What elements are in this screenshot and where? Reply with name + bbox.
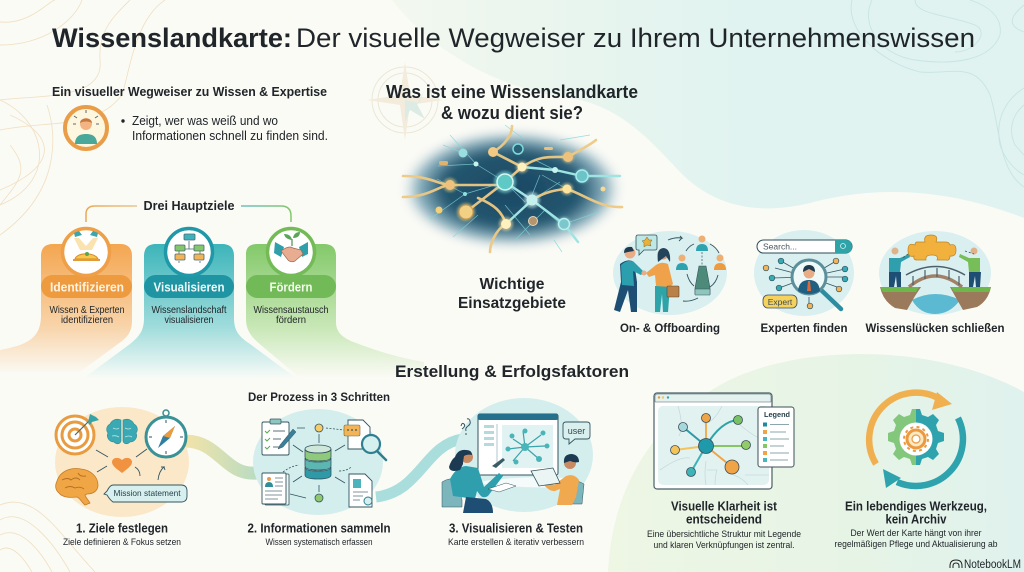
icon: puzzle piece (908, 235, 956, 260)
icon: person left (889, 248, 910, 287)
panel: step 1 set goals (55, 407, 189, 548)
column: Fördern: fördern (276, 314, 306, 326)
column: Visualisieren (84, 228, 296, 378)
network connectors (283, 424, 351, 502)
label: Wissenslücken schließen (866, 321, 1004, 335)
panel: three main goals (0, 199, 424, 378)
icon: clipboard with pen (262, 419, 296, 455)
icon: map window (654, 393, 772, 489)
icon: user speech bubble (563, 422, 590, 444)
arrow: ribbon step 2 to 3 (376, 439, 462, 497)
description (834, 528, 998, 550)
icon: question marks (461, 419, 470, 435)
heading (671, 500, 778, 526)
icon: database (305, 445, 331, 479)
heading: what is a knowledge map: Was ist eine Wissenslandkarte (386, 82, 638, 102)
description: Wissen systematisch erfassen (266, 537, 372, 548)
icon: river banks (880, 287, 991, 310)
heading: intro: Ein visueller Wegweiser zu Wissen & Expertise (52, 84, 327, 99)
title: Der visuelle Wegweiser zu Ihrem Unternehmenswissen (296, 23, 975, 53)
description: Der Wert der Karte hängt von ihrer (850, 528, 982, 539)
description: regelmäßigen Pflege und Aktualisierung ab (834, 539, 998, 550)
column: Identifizieren: Wissen & Experten (50, 304, 125, 316)
icon: expert person (65, 107, 107, 149)
icon: man with tablet (531, 454, 584, 505)
heading: process in 3 steps: Der Prozess in 3 Schritten (248, 390, 390, 404)
panel: step 2 collect information (248, 409, 391, 548)
heading: entscheidend (686, 512, 762, 526)
icon: resume document (262, 473, 289, 505)
icon: teal brain (107, 419, 137, 444)
icon: water (912, 294, 960, 314)
panel: visual guide intro (52, 84, 328, 149)
icon: compass rose (367, 62, 443, 140)
description: und klaren Verknüpfungen ist zentral. (654, 540, 794, 551)
icon: team cycle (676, 236, 726, 301)
heading: key application areas: Einsatzgebiete (458, 295, 566, 312)
column: Fördern: Wissensaustausch (254, 304, 329, 316)
legend card (758, 407, 794, 467)
chart: glowing network map (400, 125, 624, 252)
title: Wissenslandkarte: (52, 23, 292, 53)
panel: Experten finden (754, 230, 854, 335)
column: Fördern: Fördern (270, 280, 313, 294)
heading: what is a knowledge map: & wozu dient sie? (441, 103, 583, 123)
label: 2. Informationen sammeln (248, 520, 391, 536)
panel: step 3 visualise and test (442, 398, 593, 548)
column: Visualisieren: visualisieren (164, 314, 214, 326)
column: Visualisieren: Visualisieren (154, 280, 225, 294)
icon: target (56, 414, 99, 454)
icon: gear with cycle arrows (869, 392, 963, 488)
panel: visual clarity (647, 393, 801, 551)
icon: heart (112, 458, 132, 473)
icon: orange brain (56, 468, 98, 505)
icon: woman at table (442, 450, 516, 513)
icon: bridge (906, 266, 965, 287)
heading: creation and success factors: Erstellung & Erfolgsfaktoren (395, 363, 629, 381)
column: Identifizieren (0, 228, 132, 372)
description (647, 529, 801, 551)
description: Karte erstellen & iterativ verbessern (448, 537, 584, 548)
heading: Ein lebendiges Werkzeug, (845, 500, 987, 514)
icon: document with chart (349, 474, 372, 507)
icon: woman with briefcase (642, 248, 679, 312)
heading: kein Archiv (886, 512, 947, 526)
description: Ziele definieren & Fokus setzen (63, 537, 181, 548)
panel: On- & Offboarding (613, 231, 727, 335)
heading (845, 500, 987, 526)
heading: Visuelle Klarheit ist (671, 500, 778, 514)
search bar: Search... (763, 242, 797, 252)
panel: living tool (834, 392, 998, 550)
column: Identifizieren: Identifizieren (50, 280, 124, 294)
arrow: ribbon step 1 to 2 (186, 441, 257, 473)
text: bullet description: Zeigt, wer was weiß und wo (132, 113, 278, 128)
icon: compass (146, 410, 186, 457)
label: 3. Visualisieren & Testen (449, 520, 583, 536)
label: 1. Ziele festlegen (76, 520, 168, 536)
panel: Wissenslücken schließen (866, 231, 1004, 335)
heading: key application areas (458, 276, 566, 312)
icon: user speech bubble: user (568, 426, 585, 436)
label: On- & Offboarding (620, 321, 720, 335)
heading: Drei Hauptziele: Drei Hauptziele (144, 199, 235, 213)
icon: person right (959, 248, 981, 287)
column: Fördern (246, 228, 424, 378)
callout: mission statement (104, 485, 187, 502)
heading: key application areas: Wichtige (480, 276, 545, 293)
icon: monitor with network (472, 414, 580, 487)
icon: man (614, 247, 644, 312)
icon: speech bubble (636, 235, 657, 255)
icon: document with magnifier (344, 420, 386, 460)
column: Identifizieren: identifizieren (61, 314, 113, 326)
icon: expert network magnifier: Expert (768, 297, 793, 307)
description: Eine übersichtliche Struktur mit Legende (647, 529, 801, 540)
column: Visualisieren: Wissenslandschaft (152, 304, 227, 316)
callout: mission statement: Mission statement (114, 488, 181, 498)
legend card: Legend (764, 410, 790, 419)
text: bullet description: Informationen schnell zu finden sind. (132, 128, 328, 143)
heading: what is a knowledge map (386, 82, 638, 123)
label: Experten finden (760, 321, 848, 335)
text: bullet description (121, 113, 328, 143)
